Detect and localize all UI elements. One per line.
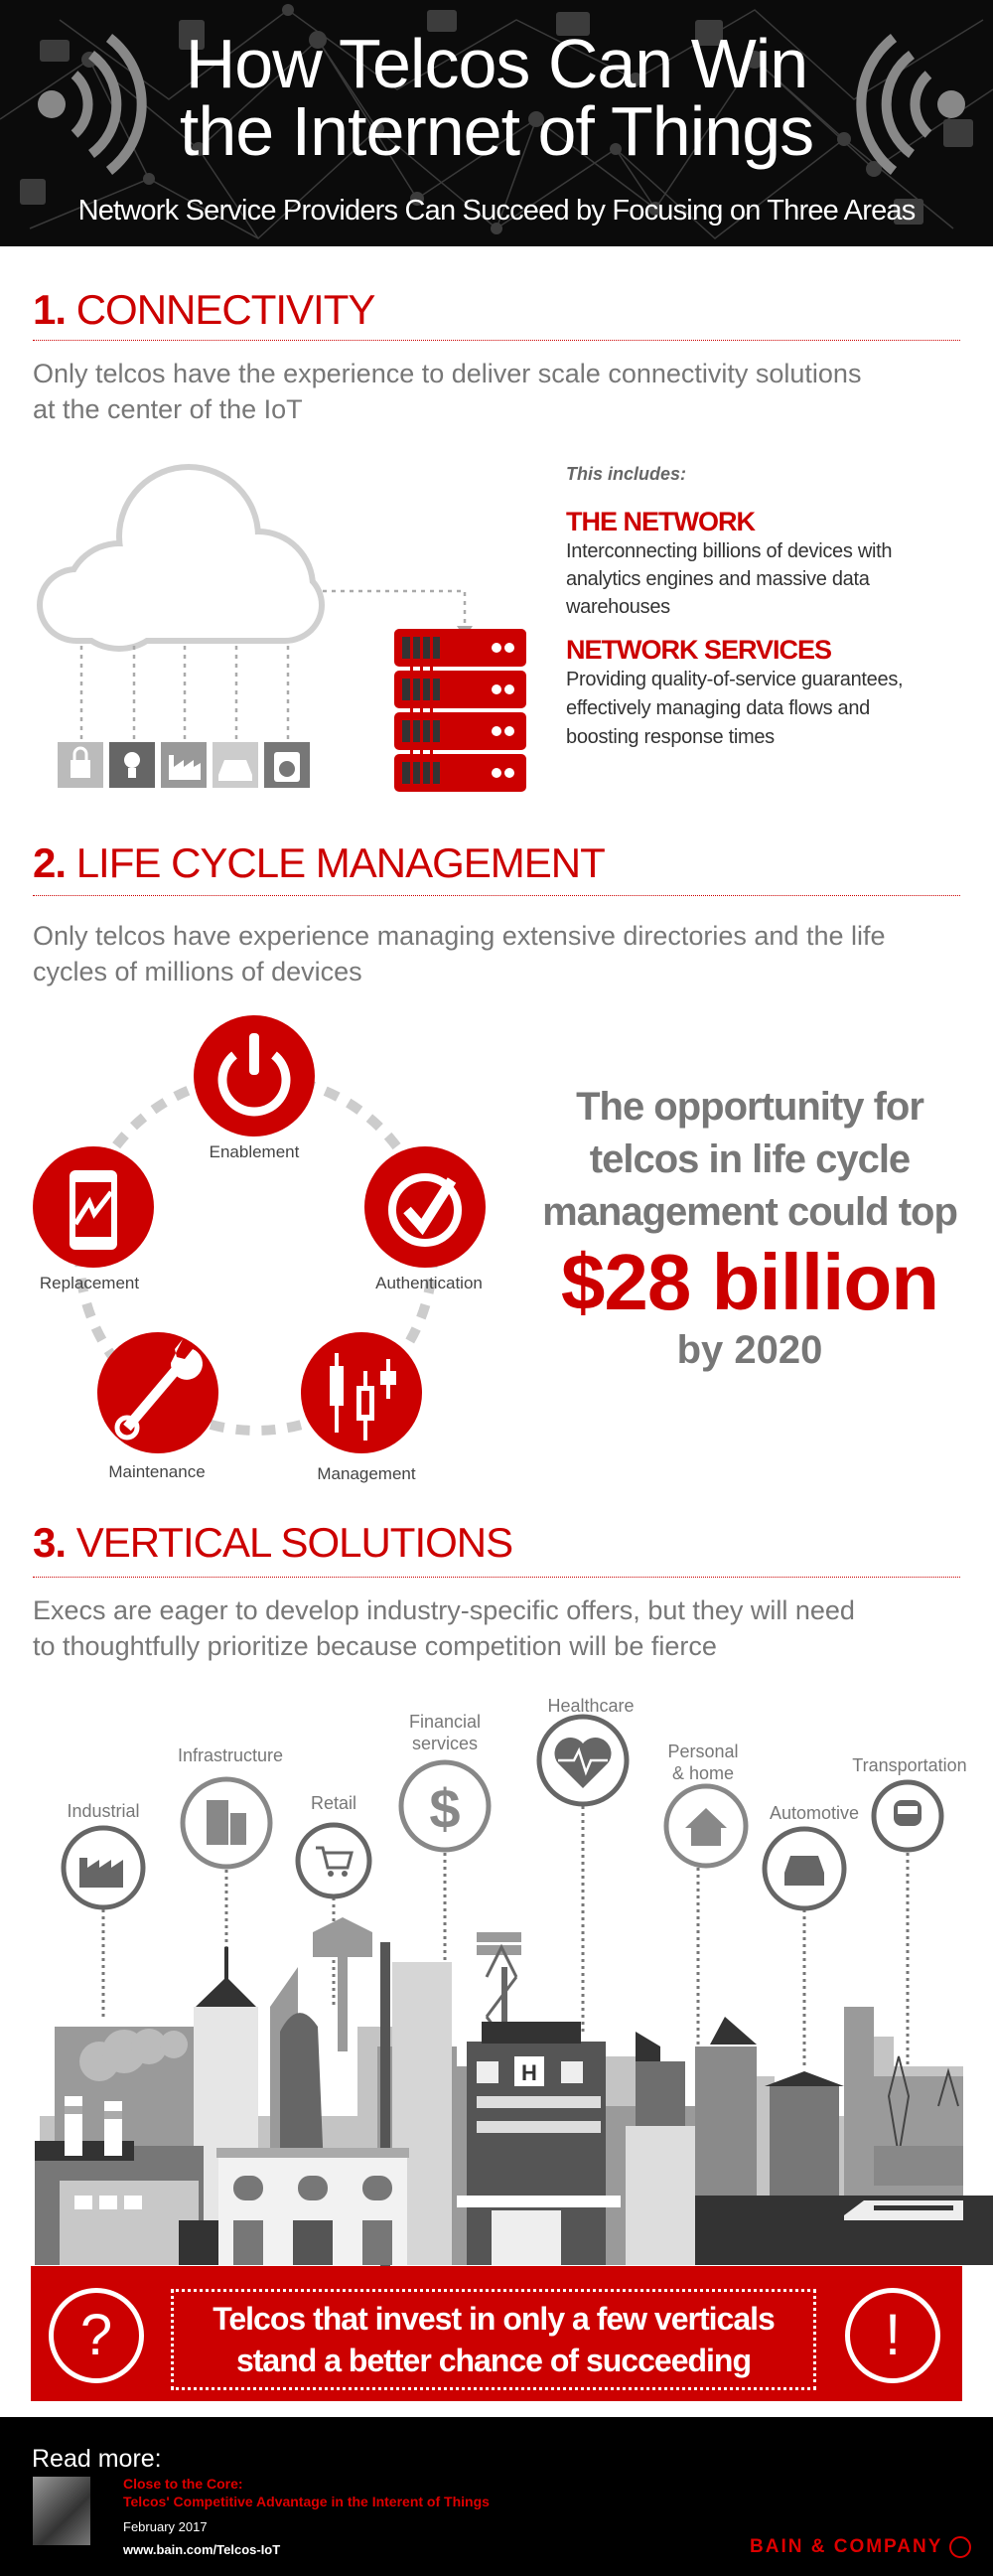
footer: www.bain.com/Telcos-IoT	[123, 2542, 280, 2557]
train glyph	[894, 1800, 922, 1826]
the network: THE NETWORK	[566, 507, 755, 536]
text: Retail	[311, 1793, 356, 1813]
footer: February 2017	[123, 2519, 208, 2534]
diagram: life cycle circle	[33, 1015, 486, 1453]
text: Automotive	[770, 1803, 859, 1823]
text: connectivity intro: at the center of the IoT	[33, 394, 303, 424]
tall buildings: H	[521, 2060, 537, 2085]
title	[180, 25, 813, 170]
text: Authentication	[375, 1274, 483, 1292]
icon: wifi signal right	[856, 34, 965, 175]
infrastructure glyph	[207, 1800, 228, 1845]
text: Replacement	[40, 1274, 139, 1292]
heading: vertical solutions: 3. VERTICAL SOLUTIONS	[33, 1519, 512, 1566]
publication info	[123, 2476, 490, 2509]
publication info: Close to the Core:	[123, 2476, 243, 2492]
callout: $28 billion	[542, 1085, 957, 1372]
financial glyph: $	[429, 1777, 461, 1840]
cloud	[37, 464, 325, 652]
heading: life cycle management: 2. LIFE CYCLE MANAGEMENT	[33, 839, 605, 886]
text: life cycle intro	[33, 921, 886, 986]
text: life cycle intro: cycles of millions of devices	[33, 957, 362, 986]
text: Financial	[409, 1712, 481, 1732]
heading: connectivity: 1. CONNECTIVITY	[33, 286, 374, 333]
callout banner: invest in few verticals	[31, 2266, 962, 2401]
authentication icon	[364, 1146, 486, 1268]
automotive glyph	[784, 1856, 824, 1886]
text block: this includes: Providing quality-of-service guarantees,	[566, 669, 903, 690]
buildings back layer	[40, 2027, 963, 2265]
text: connectivity intro	[33, 359, 861, 424]
network services: NETWORK SERVICES	[566, 635, 831, 665]
icon: exclamation	[845, 2288, 940, 2383]
read more heading: Read more:	[32, 2445, 162, 2473]
hospital	[467, 2042, 606, 2265]
icon: exclamation: !	[885, 2303, 901, 2367]
enablement icon	[194, 1015, 315, 1136]
labels: verticals: Industrial	[67, 1801, 140, 1821]
healthcare glyph	[554, 1738, 612, 1788]
illustration: city skyline with vertical icons	[35, 1806, 993, 2266]
maintenance icon	[97, 1332, 218, 1453]
device icons	[58, 742, 310, 788]
vertical icons	[62, 1715, 943, 1911]
industrial glyph	[79, 1858, 123, 1888]
text: Personal	[667, 1742, 739, 1761]
retail glyph	[316, 1848, 352, 1868]
text: services	[412, 1734, 478, 1753]
text: callout message: Telcos that invest in only a few verticals	[213, 2301, 775, 2337]
thumbnail	[33, 2477, 90, 2545]
home glyph	[685, 1808, 727, 1846]
text: vertical intro: to thoughtfully prioritize because competition will be fierce	[33, 1631, 717, 1661]
header banner	[0, 0, 993, 246]
text: Management	[317, 1464, 416, 1483]
network background pattern	[0, 4, 993, 239]
callout: $28 billion: by 2020	[677, 1328, 822, 1372]
replacement icon	[33, 1146, 154, 1268]
text: Infrastructure	[178, 1745, 283, 1765]
diagram: cloud and devices	[37, 464, 473, 788]
callout: $28 billion: management could top	[542, 1190, 957, 1234]
dotted connectors	[103, 1806, 908, 2106]
logo: Bain & Company: BAIN & COMPANY	[750, 2536, 942, 2557]
callout: $28 billion: $28 billion	[561, 1238, 938, 1326]
text block: this includes: This includes:	[566, 464, 686, 484]
icon: wifi signal left	[38, 34, 147, 175]
callout: $28 billion: telcos in life cycle	[590, 1137, 910, 1181]
text: callout message: stand a better chance of succeeding	[236, 2343, 751, 2378]
text block: this includes: effectively managing data flows and	[566, 697, 870, 719]
text block: this includes: warehouses	[566, 596, 670, 618]
text: & home	[672, 1763, 734, 1783]
text block: this includes	[566, 464, 903, 748]
callout: $28 billion: The opportunity for	[576, 1085, 923, 1129]
text block: this includes: analytics engines and massive data	[566, 568, 870, 590]
text: vertical intro	[33, 1595, 855, 1661]
footer	[0, 2417, 993, 2576]
publication info: Telcos' Competitive Advantage in the Interent of Things	[123, 2494, 490, 2509]
labels: life cycle stages: Enablement	[210, 1142, 299, 1161]
text: callout message	[171, 2289, 816, 2390]
subtitle: Network Service Providers Can Succeed by Focusing on Three Areas	[78, 195, 915, 227]
text block: this includes: Interconnecting billions of devices with	[566, 540, 892, 562]
text: life cycle intro: Only telcos have experience managing extensive directories and the life	[33, 921, 886, 951]
retail shop	[218, 2156, 407, 2265]
icon: red server stack	[394, 629, 526, 792]
text: Healthcare	[547, 1696, 635, 1716]
text: Maintenance	[108, 1462, 206, 1481]
title: How Telcos Can Win	[186, 25, 807, 102]
management icon	[301, 1332, 422, 1453]
icon: question mark	[49, 2288, 144, 2383]
text: connectivity intro: Only telcos have the experience to deliver scale connectivity solutions	[33, 359, 861, 388]
tall buildings	[35, 1942, 993, 2270]
title: the Internet of Things	[180, 92, 813, 170]
text: vertical intro: Execs are eager to develop industry-specific offers, but they will need	[33, 1595, 855, 1625]
icon: question mark: ?	[80, 2303, 112, 2367]
text block: this includes: boosting response times	[566, 726, 775, 748]
text: Transportation	[852, 1755, 967, 1775]
